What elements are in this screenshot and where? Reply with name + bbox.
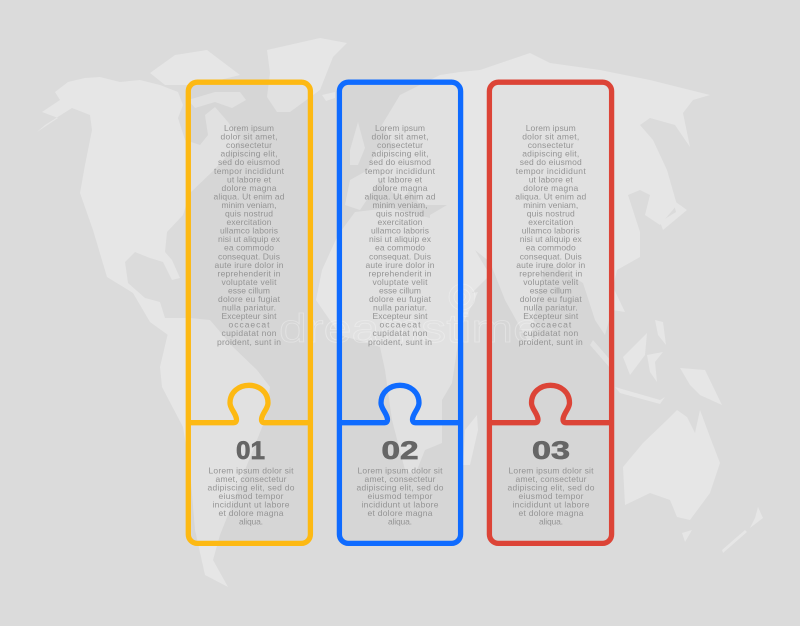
puzzle divider [339, 385, 461, 423]
panel 02 blue [339, 82, 461, 543]
bottom text: et dolore magna [218, 508, 284, 518]
bottom text: adipiscing elit, sed do [508, 483, 595, 493]
java [615, 387, 665, 404]
watermark [279, 284, 541, 351]
top text: ullamco laboris [522, 226, 580, 236]
top text: proident, sunt in [217, 337, 281, 347]
top text: nulla pariatur. [373, 303, 427, 313]
sumatra [590, 340, 613, 368]
bottom text: eiusmod tempor [218, 491, 284, 501]
top text: proident, sunt in [519, 337, 583, 347]
iceland [322, 92, 335, 101]
top text: proident, sunt in [368, 337, 432, 347]
borneo [623, 333, 647, 375]
top text: Lorem ipsum [375, 123, 425, 133]
number 02: 02 [382, 437, 418, 465]
greenland [267, 38, 347, 112]
top text: nulla pariatur. [524, 303, 578, 313]
top text: dolore eu fugiat [520, 294, 582, 304]
number 03: 03 [532, 437, 570, 465]
top text: dolore eu fugiat [218, 294, 281, 304]
top text: dolor sit amet, [220, 132, 278, 142]
top text: aliqua. Ut enim ad [515, 191, 586, 201]
top text: consequat. Duis [520, 251, 582, 261]
top text: nisi ut aliquip ex [218, 234, 281, 244]
outline [339, 82, 461, 543]
top text: consequat. Duis [369, 251, 431, 261]
top text: exercitation [378, 217, 423, 227]
panel 03 red [489, 82, 612, 543]
top text: consectetur [528, 140, 574, 150]
top text: Excepteur sint [222, 311, 277, 321]
top text: dolore eu fugiat [369, 294, 432, 304]
number 01: 01 [236, 437, 265, 465]
top text: adipiscing elit, [372, 149, 428, 159]
top text: quis nostrud [376, 208, 424, 218]
bottom text: amet, consectetur [364, 474, 436, 484]
top text: Lorem ipsum [224, 123, 274, 133]
top text: ea commodo [375, 243, 425, 253]
philippines [655, 320, 666, 345]
top text: esse cillum [228, 285, 270, 295]
tasmania [682, 530, 692, 542]
world map [37, 38, 763, 587]
outline [489, 82, 612, 543]
baffin island [188, 92, 246, 108]
top text: ut labore et [227, 174, 272, 184]
new zealand north [750, 507, 763, 528]
south america [160, 318, 270, 587]
top text: reprehenderit in [519, 268, 582, 278]
panel 01 yellow [188, 82, 310, 543]
top text: aliqua. Ut enim ad [214, 191, 285, 201]
bottom text [208, 466, 295, 527]
top text: dolore magna [523, 183, 578, 193]
top text: sed do eiusmod [369, 157, 431, 167]
new zealand south [722, 530, 747, 553]
top text: aliqua. Ut enim ad [364, 191, 436, 201]
top text: Lorem ipsum [526, 123, 576, 133]
great britain [350, 122, 365, 165]
bottom text [508, 466, 595, 527]
bottom text: amet, consectetur [216, 474, 287, 484]
bottom text [356, 466, 444, 527]
top text: consectetur [377, 140, 423, 150]
bottom text: Lorem ipsum dolor sit [358, 466, 443, 476]
sulawesi [647, 352, 663, 382]
top text: voluptate velit [222, 277, 277, 287]
top text: dolore magna [222, 183, 277, 193]
top text: nulla pariatur. [222, 303, 276, 313]
top text: exercitation [226, 217, 272, 227]
top text: reprehenderit in [218, 268, 281, 278]
top text: minim veniam, [523, 200, 578, 210]
bottom text: incididunt ut labore [362, 500, 439, 510]
top text: adipiscing elit, [220, 149, 278, 159]
top text: occaecat [228, 320, 270, 330]
top text: aute irure dolor in [214, 260, 284, 270]
africa [316, 208, 478, 475]
top text: ullamco laboris [220, 226, 278, 236]
outline [188, 82, 310, 543]
top text: aute irure dolor in [516, 260, 585, 270]
bottom text: aliqua. [388, 517, 412, 527]
top text: tempor incididunt [516, 166, 586, 176]
watermark logo [449, 284, 475, 310]
bottom text: eiusmod tempor [518, 491, 584, 501]
top text: esse cillum [379, 285, 421, 295]
bottom text: amet, consectetur [516, 474, 587, 484]
top text: dolore magna [372, 183, 428, 193]
north america [37, 77, 240, 335]
bottom text: incididunt ut labore [212, 500, 290, 510]
top text: ullamco laboris [371, 226, 429, 236]
top text: esse cillum [530, 285, 572, 295]
top text: exercitation [528, 217, 573, 227]
top text: tempor incididunt [214, 166, 285, 176]
top text: ut labore et [529, 174, 573, 184]
top text: dolor sit amet, [372, 132, 428, 142]
top text: tempor incididunt [365, 166, 436, 176]
bottom text: adipiscing elit, sed do [356, 483, 444, 493]
top text: nisi ut aliquip ex [369, 234, 432, 244]
top text: adipiscing elit, [522, 149, 579, 159]
bottom text: aliqua. [539, 517, 563, 527]
madagascar [463, 415, 478, 465]
bottom text: Lorem ipsum dolor sit [208, 466, 294, 476]
top text [214, 123, 285, 347]
top text: ea commodo [526, 243, 576, 253]
top text: occaecat [530, 320, 572, 330]
australia [623, 410, 720, 520]
top text: quis nostrud [225, 208, 273, 218]
top text: cupidatat non [372, 328, 428, 338]
top text: nisi ut aliquip ex [520, 234, 582, 244]
top text [515, 123, 586, 347]
top text: voluptate velit [523, 277, 579, 287]
top text: voluptate velit [372, 277, 428, 287]
top text: cupidatat non [222, 328, 277, 338]
top text: minim veniam, [222, 200, 276, 210]
top text: occaecat [380, 320, 421, 330]
arctic islands [150, 50, 240, 85]
top text: sed do eiusmod [520, 157, 582, 167]
bottom text: eiusmod tempor [368, 491, 433, 501]
bottom text: adipiscing elit, sed do [208, 483, 295, 493]
japan [660, 200, 687, 230]
bottom text: aliqua. [239, 517, 263, 527]
watermark word: dreamstime [279, 307, 541, 351]
bottom text: et dolore magna [368, 508, 433, 518]
top text: reprehenderit in [368, 268, 432, 278]
top text: aute irure dolor in [366, 260, 435, 270]
top text [364, 123, 436, 347]
bottom text: et dolore magna [518, 508, 584, 518]
eurasia [345, 53, 710, 345]
new guinea [680, 368, 722, 405]
top text: Excepteur sint [523, 311, 579, 321]
top text: quis nostrud [527, 208, 575, 218]
top text: ut labore et [378, 174, 423, 184]
puzzle divider [188, 385, 310, 423]
top text: Excepteur sint [372, 311, 428, 321]
top text: sed do eiusmod [218, 157, 280, 167]
top text: consequat. Duis [218, 251, 280, 261]
top text: dolor sit amet, [522, 132, 579, 142]
top text: cupidatat non [523, 328, 578, 338]
bottom text: Lorem ipsum dolor sit [508, 466, 594, 476]
bottom text: incididunt ut labore [512, 500, 590, 510]
top text: minim veniam, [372, 200, 428, 210]
top text: consectetur [226, 140, 272, 150]
top text: ea commodo [224, 243, 274, 253]
puzzle divider [489, 385, 612, 423]
